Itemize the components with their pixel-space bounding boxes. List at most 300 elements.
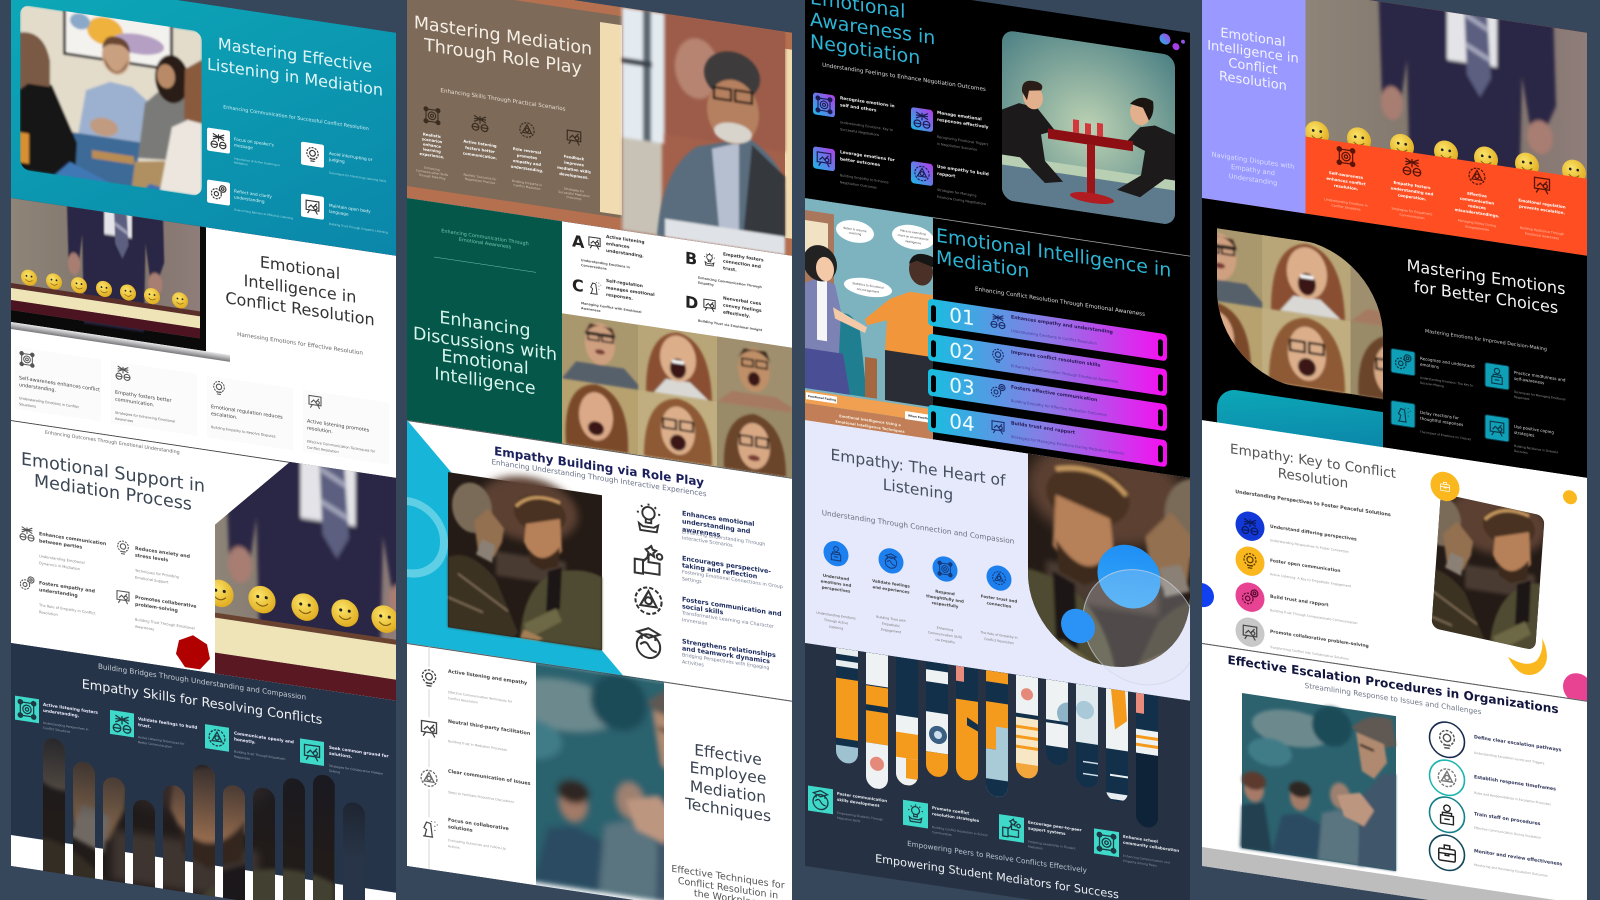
item: reflect and clarify: Overcoming Barriers to Effective Listening xyxy=(234,207,293,220)
photo: two men in rounded frame xyxy=(989,425,1235,722)
item: open body language: Maintain open body xyxy=(329,202,371,213)
panel: Empathy Skills for Resolving Conflicts xyxy=(11,643,396,900)
icon: red heptagon xyxy=(176,633,210,671)
item D: convey feelings xyxy=(723,302,762,314)
item: effective communication xyxy=(1455,165,1500,234)
panel: Emotional Awareness in Negotiation xyxy=(805,0,1190,256)
item: realistic scenarios: Through Role-Play xyxy=(417,173,446,181)
item: enhance school collaboration: Enhance school xyxy=(1123,833,1158,844)
item: respond thoughtfully: thoughtfully and xyxy=(926,593,964,603)
title: Listening xyxy=(883,476,953,504)
item: promote conflict resolution: Promote conflict xyxy=(932,805,969,815)
item: delay reactions: thoughtful responses xyxy=(1420,415,1463,427)
item: empathy: Empathy fosters xyxy=(1393,179,1431,190)
item D: Nonverbal cues xyxy=(723,295,762,307)
illustration: two people talking: encouragement xyxy=(857,287,880,294)
item: foster communication: Mediation Skills xyxy=(837,816,861,823)
item: empathy: understanding and xyxy=(1391,185,1434,196)
item: active listening: communication. xyxy=(463,150,498,160)
item: understand emotions xyxy=(816,538,856,633)
item: feedback: mediation skills xyxy=(557,164,592,174)
panel: Mastering Mediation Through Role Play xyxy=(407,0,792,256)
item: practice mindfulness: self-awareness xyxy=(1514,375,1544,385)
item: delay reactions: The Impact of Emotions on Choices xyxy=(1419,430,1472,441)
item: active listening: Active listening promotes xyxy=(307,418,370,434)
title: Resolution xyxy=(1278,465,1348,492)
photo: two men talking xyxy=(448,465,602,650)
item: self-awareness: understanding. xyxy=(19,382,56,394)
item: empathy: Strategies for Enhancing Emotional xyxy=(115,411,175,424)
illustration: chess negotiation xyxy=(1002,30,1175,225)
item: leverage emotions: Leverage emotions for xyxy=(840,149,896,163)
decorative dots xyxy=(1160,33,1185,52)
badge: yellow circle with icon xyxy=(1430,470,1460,503)
item: collaborative solutions xyxy=(419,812,509,857)
item: self-awareness xyxy=(1324,145,1368,213)
item: fosters empathy xyxy=(20,576,96,616)
item: emotional regulation xyxy=(211,380,282,438)
item: fosters empathy: understanding xyxy=(39,587,78,598)
item: build trust xyxy=(1236,581,1358,628)
title: Intelligence in xyxy=(1207,38,1299,66)
item A: Understanding Emotions in xyxy=(581,258,631,270)
item: role reversal: promotes xyxy=(517,152,538,160)
item: recognize emotions: Recognize and understand xyxy=(1420,355,1475,368)
item: reduces anxiety xyxy=(118,540,190,588)
item: emotional regulation: Emotional regulation reduces xyxy=(211,404,283,421)
subtitle: Enhancing Communication for Successful Conflict Resolution xyxy=(223,104,369,132)
item: establish timeframes: Roles and Responsibilities in Escalation Processes xyxy=(1474,791,1551,806)
subtitle: Mastering Emotions for Improved Decision-Making xyxy=(1425,328,1547,353)
item: role reversal xyxy=(511,120,544,192)
item: enhance school collaboration: community collaboration xyxy=(1123,839,1179,853)
item: active listening: understanding. xyxy=(43,707,80,718)
item: foster communication: skills development xyxy=(837,796,879,808)
item: seek common ground: Strategies for Collaborative Problem xyxy=(329,764,383,776)
item: encourages perspective-taking: taking and reflection xyxy=(682,561,758,581)
item: feedback: Feedback xyxy=(564,153,585,161)
item B: B xyxy=(685,248,697,269)
item D: D xyxy=(685,292,698,313)
photo: pointing man, blurred teal xyxy=(488,654,710,900)
item: avoid interrupting: judging xyxy=(328,156,345,164)
item: neutral third-party: Building Trust in Mediation Processes xyxy=(448,739,507,752)
item: effective communication: Effective xyxy=(1467,190,1487,198)
item: role reversal: Conflict Mediation xyxy=(514,183,541,191)
item: active listening: Conflict Resolution xyxy=(307,445,339,454)
item: collaborative problem-solving: Transforming Conflict into Collaborative Solutions xyxy=(1269,645,1349,661)
title: Empathy: Key to Conflict xyxy=(1230,441,1396,482)
item: empathy: Awareness xyxy=(115,417,133,423)
item: coping strategies: Decisions xyxy=(1514,449,1528,455)
panel: Emotional Intelligence in Mediation xyxy=(803,198,1190,479)
title: Awareness in xyxy=(810,7,935,49)
item: recognize emotions xyxy=(813,91,895,139)
panel: Student Mediators xyxy=(805,643,1190,900)
item: strengthens relationships: Activities xyxy=(682,659,704,668)
title: Emotional xyxy=(260,252,340,283)
title: Emotional Support in xyxy=(21,450,205,497)
item: collaborative problem-solving xyxy=(1236,616,1369,665)
item: fosters communication xyxy=(635,586,782,638)
item: role reversal: Role reversal xyxy=(513,145,541,155)
item: monitor effectiveness xyxy=(1430,833,1562,888)
item: empathy xyxy=(1391,156,1434,222)
item A xyxy=(572,228,645,277)
item: promotes collaborative: Building Trust Through Emotional xyxy=(135,618,195,631)
item: encourage peer support: Mediators xyxy=(1028,844,1043,851)
item: active listening xyxy=(307,394,376,453)
item: focus on speaker's message: Mediation xyxy=(234,160,248,167)
panel: Effective Employee Mediation Techniques xyxy=(407,642,792,900)
item: fosters empathy: Resolution xyxy=(39,610,58,617)
title: Listening in Mediation xyxy=(207,54,383,99)
item: empathy: Strategies for Empathetic xyxy=(1392,206,1433,217)
photo: suit with worried emoji xyxy=(1305,0,1587,219)
column 3 slides xyxy=(803,0,1235,900)
item: active listening: Effective Communication Techniques for xyxy=(307,439,376,454)
item: define escalation pathways xyxy=(1430,720,1562,774)
title: Resolution xyxy=(1219,69,1287,94)
item: validate feelings: Validate feelings to build xyxy=(138,716,197,729)
title: Mastering Effective xyxy=(218,34,372,76)
item B: trust. xyxy=(723,265,737,273)
list item 04 xyxy=(928,404,1167,467)
item C: Awareness xyxy=(581,306,601,313)
list item 03: Building Empathy for Effective Mediation Outcomes xyxy=(1011,399,1107,417)
item: validate feelings: Engagement xyxy=(881,627,902,635)
item C: manages emotional xyxy=(606,284,655,298)
decorative teal triangle with ring xyxy=(372,415,623,675)
photo grid: emotional faces xyxy=(562,313,792,478)
item: promotes collaborative xyxy=(116,590,196,630)
item: monitor effectiveness: Monitor and review effectiveness xyxy=(1474,848,1562,868)
item C: responses. xyxy=(606,291,633,301)
list item 01: 01 xyxy=(949,303,975,330)
item: enhances emotional understanding: awareness xyxy=(682,525,721,539)
item: enhance school collaboration xyxy=(1094,828,1179,871)
item: enhances emotional understanding: Enhances emotional xyxy=(682,509,754,528)
item: realistic scenarios: scenarios xyxy=(422,136,443,144)
item: respond thoughtfully: via Empathy xyxy=(935,638,955,645)
item: understand emotions: Understand xyxy=(823,572,849,581)
item: active listening: Active listening fosters xyxy=(43,701,98,715)
subtitle: Understanding xyxy=(1229,172,1277,187)
item: foster open communication xyxy=(1236,545,1352,591)
item: enhances communication: Understanding Emotional xyxy=(39,554,85,565)
item: validate feelings: and experiences xyxy=(873,584,910,594)
item: fosters empathy: The Role of Empathy in Conflict xyxy=(38,603,96,616)
item: open body language: Building Trust Through Empathic Listening xyxy=(329,222,388,235)
item: active listening and empathy: Effective Communication Techniques for xyxy=(448,690,513,704)
item: respond thoughtfully xyxy=(926,554,964,646)
item: enhances emotional understanding: Interactive Scenarios xyxy=(682,535,733,548)
item: active listening: resolution. xyxy=(307,425,333,435)
title: Intelligence in xyxy=(244,270,356,306)
title: Mastering Emotions xyxy=(1407,255,1565,298)
item: encourage peer support: Encourage peer-to-peer xyxy=(1028,819,1082,832)
item: validate feelings: Empathetic xyxy=(882,622,900,628)
item: strengthens relationships: and teamwork dynamics xyxy=(682,644,770,665)
illustration: two people talking: Emotional Intelligence Techniques xyxy=(835,420,905,434)
item: foster trust: Foster trust and xyxy=(981,593,1017,603)
list item 01: Enhances empathy and understanding xyxy=(1011,314,1113,336)
panel: Empathy Building via Role Play xyxy=(372,415,792,701)
item: empathy: communication. xyxy=(115,397,155,409)
photo: emotional faces in leaf shape xyxy=(1177,222,1435,406)
item: foster trust: Conflict Resolution xyxy=(984,637,1014,645)
item: realistic scenarios: Enhancing xyxy=(424,166,440,172)
item: promotes collaborative: Awareness xyxy=(135,625,154,631)
list item 04: 04 xyxy=(949,409,975,436)
item A: enhances xyxy=(606,240,630,250)
item: feedback xyxy=(557,129,592,203)
item: reduces anxiety: Emotional Support xyxy=(135,576,169,585)
item: feedback: improves xyxy=(564,159,585,167)
title: Effective xyxy=(694,741,762,769)
item A: understanding. xyxy=(606,247,644,259)
item: effective communication: communication xyxy=(1460,195,1494,205)
item: build trust: Building Trust Through Compassionate Communication xyxy=(1270,608,1358,625)
item: reflect and clarify: understanding xyxy=(234,194,265,204)
item: build trust: Build trust and rapport xyxy=(1270,594,1329,609)
item: self-awareness: Conflict Situations xyxy=(1332,203,1361,212)
item C: Self-regulation xyxy=(606,277,643,289)
photo: pointing man xyxy=(1240,693,1396,871)
item: understand emotions: Through Active xyxy=(823,618,848,625)
list item 04: Strategies for Managing Emotions During Mediation Sessions xyxy=(1011,435,1124,456)
item: empathy xyxy=(115,366,175,423)
item: enhance school collaboration: Enhancing Communication and xyxy=(1123,854,1170,865)
illustration: two people talking: Place to executing xyxy=(900,228,926,236)
item: focus on speaker's message: Importance of Active Listening in xyxy=(234,156,280,167)
photo: suit and emoji balls xyxy=(215,462,396,700)
item: self-awareness: Situations xyxy=(19,402,36,409)
item: encourage peer support: Fostering Leadership in Student xyxy=(1028,839,1076,851)
item: emotional regulation: Emotional Awareness xyxy=(1525,231,1559,241)
item: collaborative solutions: Evaluating Outcomes and Follow-Up xyxy=(448,838,506,851)
list item 03: 03 xyxy=(949,373,975,400)
item: effective communication: misunderstandings. xyxy=(1455,206,1500,218)
item: reflect and clarify: Reflect and clarify xyxy=(234,188,272,199)
item: seek common ground: solutions. xyxy=(329,750,353,759)
item: use empathy: Use empathy to build xyxy=(937,163,989,177)
item: effective communication: reduces xyxy=(1468,202,1487,210)
item: communicate openly: Building Trust Through Empathetic xyxy=(234,749,286,761)
item: focus on speaker's message xyxy=(207,128,280,166)
item: active listening and empathy: Conflict Resolution xyxy=(448,696,478,705)
item: strengthens relationships: Bridging Perspectives with Engaging xyxy=(682,652,769,671)
photo: older woman with glasses xyxy=(622,7,785,255)
item: active listening and empathy xyxy=(419,664,528,712)
item: reduces anxiety: stress levels xyxy=(135,552,168,563)
item: empathy: Empathy fosters better xyxy=(115,390,173,404)
illustration: two people talking: chart on an emotional xyxy=(898,233,929,242)
item: self-awareness: Understanding Emotions in xyxy=(1324,197,1368,208)
item: empathy: Communication xyxy=(1399,213,1425,220)
item: manage emotional responses: responses effectively xyxy=(937,116,989,130)
item: enhances communication: Enhances communication xyxy=(39,531,106,547)
item: enhance school collaboration: Empathy Among Peers xyxy=(1123,859,1157,868)
item: realistic scenarios xyxy=(416,105,448,181)
item: self-awareness: Understanding Emotions in Conflict xyxy=(19,396,80,409)
item: emotional regulation: Emotional regulation xyxy=(1518,197,1566,209)
item: foster open communication: Foster open communication xyxy=(1270,558,1340,574)
item: neutral third-party: Neutral third-party facilitation xyxy=(448,719,531,737)
item D xyxy=(685,289,763,332)
item: enhances emotional understanding: understanding and xyxy=(682,517,751,536)
subtitle: Navigating Disputes with xyxy=(1212,150,1294,171)
item: recognize emotions: self and others xyxy=(840,102,877,113)
item: avoid interrupting xyxy=(301,142,387,183)
item C xyxy=(572,272,655,321)
item: practice mindfulness: Responses xyxy=(1514,395,1530,401)
item B: connection and xyxy=(723,258,761,270)
list item 04: Builds trust and rapport xyxy=(1011,420,1076,436)
title: Techniques xyxy=(684,795,771,826)
item: understand differing perspectives xyxy=(1236,510,1357,557)
item: delay reactions: Delay reactions for xyxy=(1420,409,1459,420)
item: strengthens relationships: Strengthens relationships xyxy=(682,637,776,659)
item: realistic scenarios: enhance xyxy=(423,141,441,149)
panel: Enhancing Discussions with Emotional Intelligence xyxy=(407,198,792,479)
item: avoid interrupting: Techniques for Enhancing Listening Skills xyxy=(328,171,387,183)
subtitle: Building Bridges Through Understanding and Compassion xyxy=(98,662,306,702)
item: realistic scenarios: Communication Skills xyxy=(416,168,448,177)
item: respond thoughtfully: respectfully xyxy=(932,600,959,609)
item: feedback: Successful Mediation xyxy=(558,190,590,198)
item: manage emotional responses: Manage emotional xyxy=(937,109,982,122)
item: encourages perspective-taking: Settings xyxy=(682,576,702,585)
item: role reversal: empathy and xyxy=(513,157,541,167)
item: validate feelings: Validate feelings xyxy=(872,578,911,588)
item: self-awareness: Self-awareness enhances conflict xyxy=(19,375,100,393)
subtitle: Understanding Through Connection and Compassion xyxy=(822,508,1015,546)
item: fosters communication: Immersion xyxy=(682,617,707,627)
photo: laptop with suit and emoji balls xyxy=(11,198,230,362)
item: communicate openly xyxy=(205,724,294,760)
item: self-awareness: Self-awareness xyxy=(1329,170,1364,180)
item: validate feelings xyxy=(872,546,911,636)
item: promotes collaborative: problem-solving xyxy=(135,601,178,614)
item: active listening xyxy=(463,114,498,186)
item C: Managing Conflict with Emotional xyxy=(581,301,641,314)
illustration: two people talking: intelligence xyxy=(905,239,921,245)
item: train staff: Effective Communication During Escalation xyxy=(1474,826,1541,840)
item: reduces anxiety: Techniques for Providing xyxy=(134,568,179,579)
item: delay reactions xyxy=(1391,400,1472,441)
item: active listening: Active listening xyxy=(463,138,497,148)
subtitle: Effective Techniques for xyxy=(671,863,785,891)
item: neutral third-party xyxy=(419,714,531,756)
subtitle: Empowering Peers to Resolve Conflicts Effectively xyxy=(907,839,1088,875)
item: enhances communication: Dynamics in Mediation xyxy=(39,561,80,571)
item: communicate openly: Responses xyxy=(234,754,250,761)
item: validate feelings: Active Listening Techniques for xyxy=(138,735,185,746)
item: use empathy: Strategies for Managing xyxy=(937,188,976,198)
item: active listening and empathy: Active listening and empathy xyxy=(448,669,528,687)
panel: Emotional Support in Mediation Process xyxy=(11,420,396,701)
item: realistic scenarios: Realistic xyxy=(423,131,441,139)
decorative circles xyxy=(1061,535,1197,693)
item: train staff xyxy=(1430,795,1541,846)
item: role reversal: Building Empathy in xyxy=(512,179,542,187)
item: focus on speaker's message: message xyxy=(234,142,253,150)
panel: Mastering Effective Listening in Mediation xyxy=(11,0,396,256)
item: communicate openly: honestly. xyxy=(234,736,256,744)
item: emotional regulation: Building Empathy to Resolve Disputes xyxy=(211,425,276,439)
item: enhances communication xyxy=(20,526,106,575)
item: clear communication xyxy=(419,764,531,807)
title: Empathy Skills for Resolving Conflicts xyxy=(82,677,323,728)
panel: Empathy The Heart of Listening xyxy=(805,398,1235,722)
item: coping strategies xyxy=(1485,414,1558,459)
item: establish timeframes xyxy=(1430,758,1556,812)
title: Employee xyxy=(690,758,766,788)
title: Mediation xyxy=(690,777,766,807)
item: train staff: Train staff on procedures xyxy=(1474,811,1541,827)
item: encourages perspective-taking xyxy=(635,544,783,597)
item: fosters communication: Transformative Learning via Character xyxy=(681,610,774,630)
item C: C xyxy=(572,275,584,296)
item: encourages perspective-taking: Fostering Emotional Connections in Group xyxy=(682,569,783,590)
item: validate feelings xyxy=(110,710,198,748)
item: manage emotional responses xyxy=(911,105,989,154)
item B: Empathy fosters xyxy=(723,251,764,263)
item: realistic scenarios: learning xyxy=(423,146,441,154)
title: for Better Choices xyxy=(1414,276,1558,317)
item: understand emotions: emotions and xyxy=(821,578,851,587)
subtitle: Enhancing Communication Through xyxy=(441,228,529,247)
item: promotes collaborative: Promotes collaborative xyxy=(135,594,196,609)
item: coping strategies: Use positive coping xyxy=(1514,423,1554,434)
subtitle: Enhancing Skills Through Practical Scenarios xyxy=(440,88,566,113)
item: promote conflict resolution: Building Conflict Resolution in School xyxy=(932,825,988,837)
decorative shapes xyxy=(1190,433,1593,706)
item: active listening: fosters better xyxy=(465,144,495,154)
item: fosters empathy: Fosters empathy and xyxy=(39,580,95,594)
item: active listening xyxy=(15,696,98,733)
item: focus on speaker's message: Focus on speaker's xyxy=(234,136,274,147)
item: use empathy xyxy=(911,159,989,207)
item: recognize emotions: Successful Negotiations xyxy=(840,127,879,137)
title: Mediation Process xyxy=(34,472,192,515)
title: Through Role Play xyxy=(423,35,582,79)
item: validate feelings: trust. xyxy=(138,722,152,729)
item: clear communication: Steps to Facilitate Productive Discussions xyxy=(448,790,514,804)
item: enhances emotional understanding: Enhancing Understanding Through xyxy=(682,529,765,547)
item: active listening: Realistic Scenarios for xyxy=(464,172,497,182)
item: promote conflict resolution xyxy=(903,800,988,842)
subtitle: Enhancing Conflict Resolution Through Emotional Awareness xyxy=(975,287,1145,318)
item: understand emotions: Listening xyxy=(829,625,843,631)
column 4 slides xyxy=(1177,0,1593,900)
title: Empathy Building via Role Play xyxy=(494,444,704,490)
item: strengthens relationships xyxy=(637,627,776,679)
item: promote conflict resolution: Communities xyxy=(932,830,952,837)
illustration: two people talking: Emotional Intelligence Using a xyxy=(839,414,901,427)
photo strips: two men xyxy=(43,738,365,900)
item: feedback: Outcomes xyxy=(566,195,582,201)
item: foster communication xyxy=(808,785,887,827)
item: emotional regulation: escalation. xyxy=(211,411,238,421)
item A: Active listening xyxy=(606,233,645,245)
item: leverage emotions: better outcomes xyxy=(840,156,880,168)
subtitle: Understanding Feelings to Enhance Negotiation Outcomes xyxy=(822,63,986,93)
item: seek common ground xyxy=(300,738,389,775)
title: Discussions with xyxy=(413,324,557,365)
item: emotional regulation: Building Resilience Through xyxy=(1520,226,1564,236)
